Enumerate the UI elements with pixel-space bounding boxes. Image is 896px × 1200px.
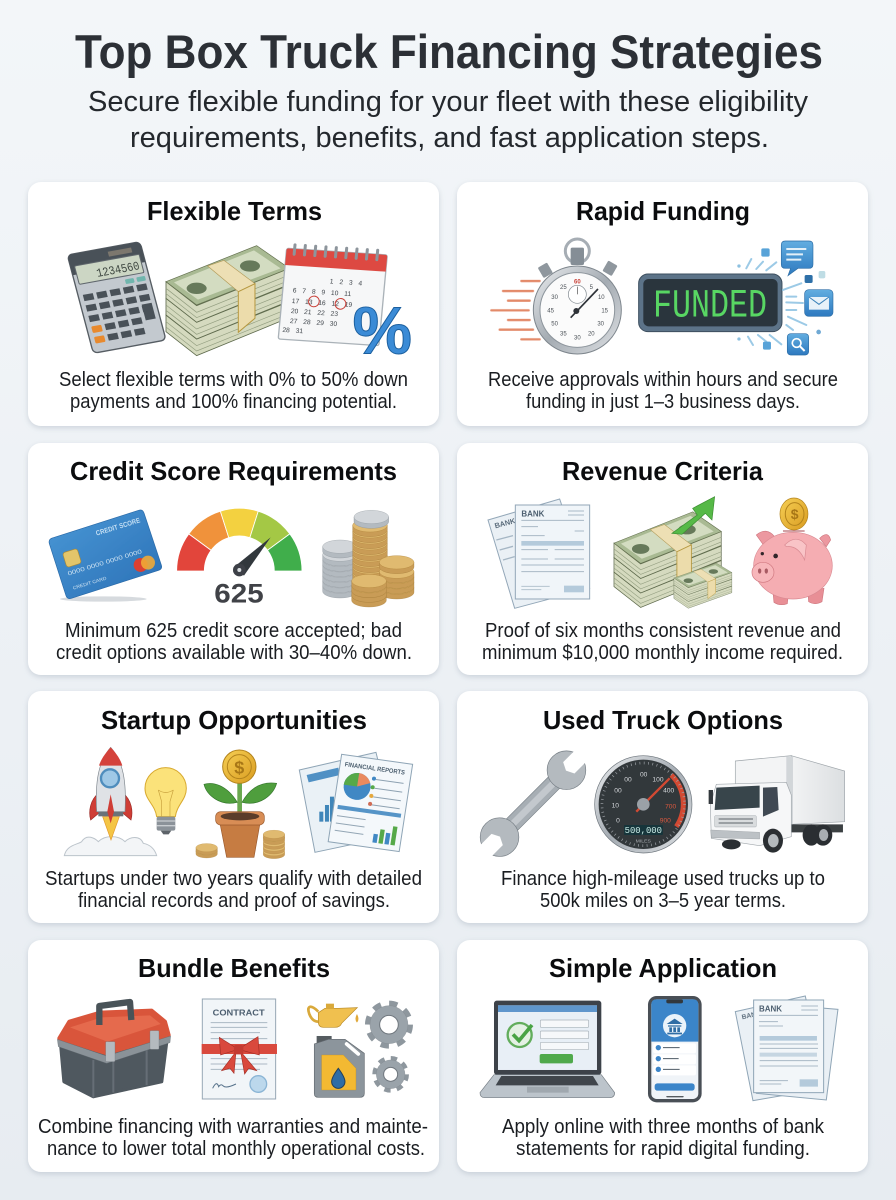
icon: funded display [639, 274, 782, 332]
body text: startup opportunities: Startups under two years qualify with detailed [45, 868, 422, 890]
body text: bundle benefits: nance to lower total monthly operational costs. [47, 1138, 425, 1160]
icon: credit card: CREDIT CARD [72, 575, 108, 591]
icon: calendar: 17 13 16 12 19 [291, 298, 353, 309]
icon: calendar: 27 28 29 30 [290, 318, 338, 328]
panel: simple application [457, 940, 868, 1172]
body text: simple application: Apply online with three months of bank [502, 1116, 825, 1138]
body text: flexible terms: Select flexible terms with 0% to 50% down [59, 369, 408, 391]
icon: credit card: CREDIT SCORE [95, 517, 142, 538]
icon: calculator [67, 242, 166, 353]
icon: chat bubble [781, 241, 813, 276]
body text: startup opportunities: financial records and proof of savings. [78, 890, 390, 912]
body text: rapid funding [488, 369, 838, 413]
heading: used truck options: Used Truck Options [543, 705, 783, 735]
chart: odometer: 00 [640, 772, 648, 779]
icon: calendar: 20 21 22 23 [291, 308, 339, 318]
icon: oil can [308, 1004, 358, 1027]
chart: odometer: 400 [663, 787, 674, 794]
illustration: bank statement, cash, piggy bank [488, 497, 832, 608]
icon: contract with ribbon [202, 999, 277, 1099]
panel: credit score requirements [28, 443, 439, 675]
icon: percent sign: % [353, 295, 412, 369]
heading: flexible terms: Flexible Terms [147, 196, 322, 226]
icon: envelope [805, 290, 833, 316]
illustration: wrench, odometer, box truck [471, 742, 845, 866]
heading: bundle benefits: Bundle Benefits [138, 953, 330, 983]
icon: contract with ribbon: CONTRACT [213, 1007, 265, 1017]
chart: odometer: 00 [624, 777, 632, 784]
body text: simple application [502, 1116, 825, 1160]
icon: money plant [196, 750, 285, 859]
icon: bank statements: BANK [521, 510, 545, 519]
subtitle [88, 86, 808, 154]
subtitle: requirements, benefits, and fast application steps. [130, 122, 769, 154]
body text: credit score: Minimum 625 credit score accepted; bad [65, 620, 402, 642]
heading: simple application: Simple Application [549, 953, 777, 983]
body text: rapid funding: Receive approvals within hours and secure [488, 369, 838, 391]
icon: stopwatch: 30 [574, 335, 581, 341]
icon: financial reports [299, 752, 413, 852]
icon: bank statements: BANK [759, 1004, 782, 1013]
icon: funded display: FUNDED [653, 285, 767, 330]
icon: stopwatch: 45 [547, 308, 555, 314]
title: Top Box Truck Financing Strategies [75, 25, 823, 78]
chart: credit score gauge [177, 508, 302, 571]
icon: large gear [368, 1004, 410, 1045]
panel: flexible terms [28, 182, 439, 426]
body text: flexible terms: payments and 100% financing potential. [70, 391, 397, 413]
body text: bundle benefits [38, 1116, 428, 1160]
icon: laptop [480, 1001, 615, 1098]
icon: stopwatch: 10 [598, 295, 605, 301]
body text: revenue criteria: Proof of six months consistent revenue and [485, 620, 841, 642]
icon: financial reports: FINANCIAL REPORTS [344, 761, 406, 777]
body text: revenue criteria [482, 620, 843, 664]
icon: cash stack [166, 246, 289, 356]
icon: data rays [746, 259, 806, 345]
body text: used truck options: 500k miles on 3–5 year terms. [540, 890, 786, 912]
icon: stopwatch [533, 239, 621, 354]
icon: bank statements [735, 996, 838, 1101]
panel: startup opportunities [28, 691, 439, 923]
icon: smartphone [648, 996, 702, 1102]
chart: odometer: 100 [652, 777, 664, 784]
chart: odometer: MILES [636, 839, 651, 844]
gauge value: 625 [214, 578, 264, 608]
chart: odometer: 0 [616, 817, 620, 824]
illustration: rocket, bulb, plant, reports [64, 747, 413, 859]
body text: credit score: credit options available with 30–40% down. [56, 642, 412, 664]
chart: odometer [595, 756, 692, 853]
icon: toolbox [57, 1002, 171, 1097]
chart: odometer: 700 [665, 803, 676, 810]
icon: stopwatch: 30 [597, 322, 605, 328]
panel: rapid funding [457, 182, 868, 426]
heading: rapid funding: Rapid Funding [576, 196, 750, 226]
illustration: toolbox, contract, oil and gears [57, 999, 410, 1099]
icon: bank statements: BAN [741, 1011, 757, 1021]
icon: credit card: 0000 0000 0000 0000 [67, 549, 144, 578]
icon: stopwatch: 25 [560, 285, 567, 291]
heading: credit score requirements: Credit Score Requirements [70, 456, 397, 486]
illustration: laptop, phone, statements [480, 996, 838, 1102]
icon: piggy bank with coin: $ [791, 506, 799, 522]
icon: stopwatch: 35 [560, 332, 567, 338]
body text: credit score [56, 620, 412, 664]
icon: piggy bank with coin [752, 498, 832, 605]
icon: calculator: 1234560 [95, 259, 141, 281]
body text: used truck options [501, 868, 825, 912]
body text: revenue criteria: minimum $10,000 monthly income required. [482, 642, 843, 664]
chart: odometer: 10 [612, 803, 619, 810]
icon: speed lines [491, 281, 540, 339]
icon: stopwatch: 50 [551, 322, 559, 328]
icon: coin stacks [323, 510, 414, 607]
icon: stopwatch: 30 [551, 295, 559, 301]
icon: light bulb [145, 768, 186, 834]
icon: bank statements: BANK [494, 516, 517, 530]
body text: simple application: statements for rapid digital funding. [516, 1138, 810, 1160]
body text: bundle benefits: Combine financing with warranties and mainte- [38, 1116, 428, 1138]
icon: credit card [49, 510, 162, 602]
heading: startup opportunities: Startup Opportunities [101, 705, 367, 735]
body text: used truck options: Finance high-mileage used trucks up to [501, 868, 825, 890]
body text: startup opportunities [45, 868, 422, 912]
icon: money plant: $ [234, 757, 244, 777]
body text: rapid funding: funding in just 1–3 business days. [526, 391, 800, 413]
panel: bundle benefits [28, 940, 439, 1172]
icon: stopwatch: 5 [590, 285, 594, 291]
icon: small gear [375, 1059, 406, 1090]
icon: stopwatch: 60 [574, 280, 581, 286]
icon: box truck [709, 756, 845, 853]
panel: revenue criteria [457, 443, 868, 675]
panel: used truck options [457, 691, 868, 923]
illustration: calculator, cash, calendar [67, 242, 412, 369]
icon: calendar: 1 2 3 4 [329, 278, 363, 288]
icon: wrench [471, 742, 595, 866]
icon: rocket [64, 747, 157, 856]
heading: revenue criteria: Revenue Criteria [562, 456, 764, 486]
icon: calendar: 28 31 [282, 327, 304, 335]
icon: magnifier [787, 334, 809, 355]
chart: odometer: 500,000 [625, 825, 662, 836]
chart: odometer: 900 [660, 817, 671, 824]
icon: stopwatch: 20 [588, 332, 595, 338]
icon: stopwatch: 15 [601, 308, 609, 314]
icon: calendar: 6 7 8 9 10 11 [292, 287, 352, 298]
icon: bank statements [488, 499, 590, 608]
icon: calendar [278, 244, 388, 346]
icon: oil jug [314, 1036, 364, 1097]
body text: flexible terms [59, 369, 408, 413]
icon: cash with rising arrow [614, 497, 732, 608]
chart: odometer: 00 [614, 787, 622, 794]
illustration: credit card, gauge, coins [49, 508, 414, 608]
subtitle: Secure flexible funding for your fleet with these eligibility [88, 86, 808, 118]
icon: gauge needle [233, 537, 271, 576]
illustration: stopwatch, funded display, message icons [491, 239, 833, 355]
